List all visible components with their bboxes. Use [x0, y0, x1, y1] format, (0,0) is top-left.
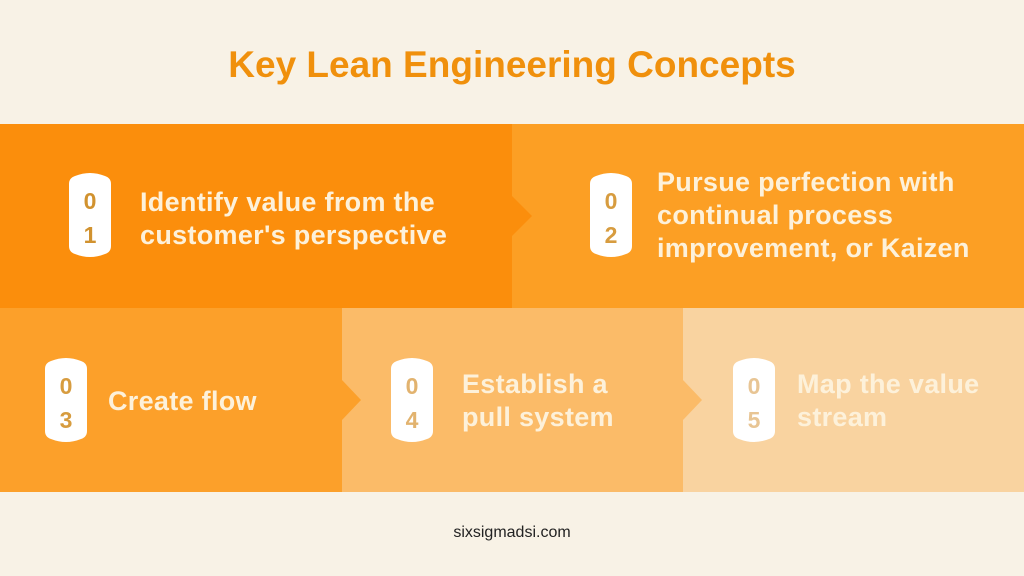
badge 1: 1	[84, 222, 97, 248]
badge 4	[391, 358, 433, 442]
text 5	[797, 369, 979, 432]
arrow: 4 to 5	[683, 380, 702, 420]
badge 3: 3	[60, 407, 72, 433]
badge 5	[733, 358, 775, 442]
text 2	[657, 167, 970, 263]
text 2: continual process	[657, 200, 893, 230]
badge 4: 4	[406, 407, 419, 433]
text 5: Map the value	[797, 369, 979, 399]
badge 3: 0	[60, 373, 72, 399]
badge 2: 2	[605, 222, 617, 248]
title: Key Lean Engineering Concepts	[228, 44, 796, 85]
badge 1: 0	[84, 188, 96, 214]
arrow: 3 to 4	[342, 380, 361, 420]
text 3: Create flow	[108, 386, 257, 416]
footer: sixsigmadsi.com	[453, 524, 571, 541]
badge 2	[590, 173, 632, 257]
badge 3	[45, 358, 87, 442]
arrow: 1 to 2	[512, 196, 532, 236]
badge 5: 5	[748, 407, 761, 433]
text 1: customer's perspective	[140, 220, 447, 250]
panel: 5	[683, 308, 1024, 492]
badge 2: 0	[605, 188, 617, 214]
panel: 4	[342, 308, 683, 492]
text 2: Pursue perfection with	[657, 167, 955, 197]
text 5: stream	[797, 402, 887, 432]
badge 1	[69, 173, 111, 257]
text 4	[462, 369, 614, 432]
text 1: Identify value from the	[140, 187, 435, 217]
text 2: improvement, or Kaizen	[657, 233, 970, 263]
text 4: pull system	[462, 402, 614, 432]
panel: 3	[0, 308, 342, 492]
badge 4: 0	[406, 373, 418, 399]
badge 5: 0	[748, 373, 760, 399]
panel: 1	[0, 124, 512, 308]
text 1	[140, 187, 447, 250]
panel: 2	[512, 124, 1024, 308]
text 4: Establish a	[462, 369, 608, 399]
